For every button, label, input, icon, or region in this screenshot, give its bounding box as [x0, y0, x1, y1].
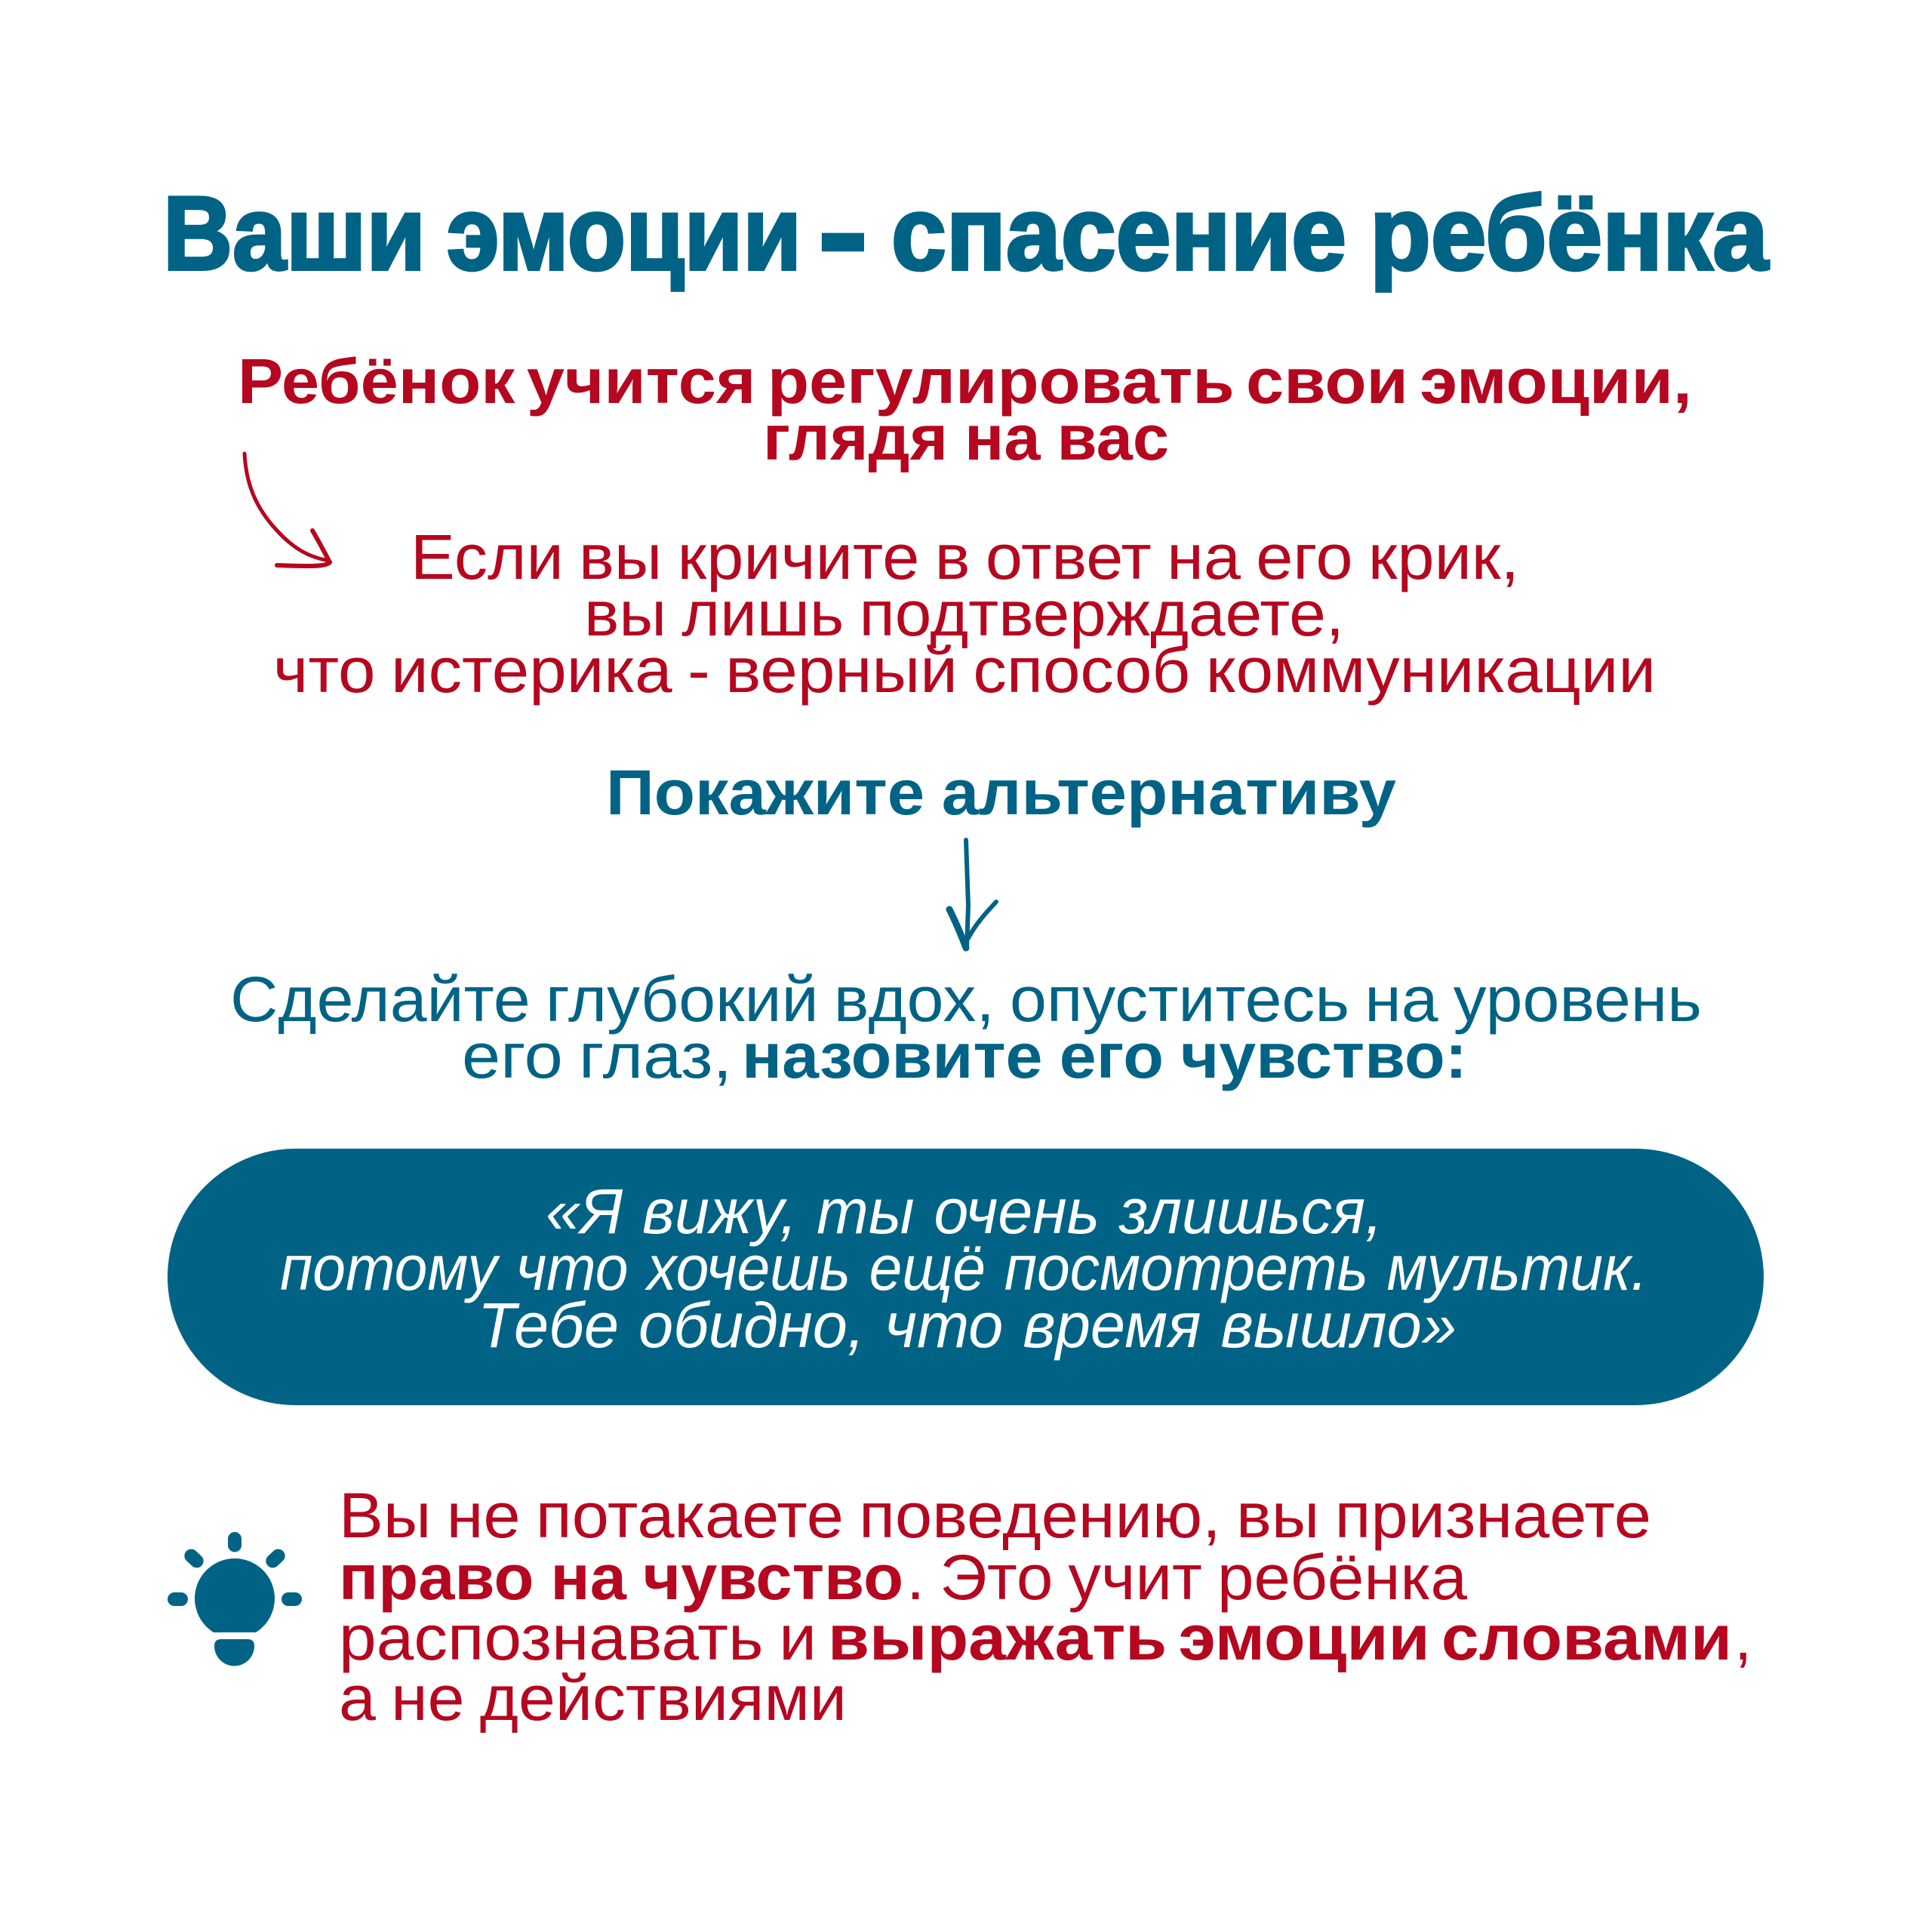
title: эмоции [447, 175, 801, 292]
teal text block [230, 964, 1702, 1091]
bottom text block: а не действиями [339, 1663, 847, 1734]
teal text block: его глаз, [462, 1020, 732, 1091]
panel: quote pill: потому что хочешь ещё посмотреть мультик. [280, 1232, 1647, 1303]
teal heading: Покажите альтернативу [606, 757, 1396, 828]
title: ребёнка [1370, 175, 1770, 292]
bottom text block: распознавать и [339, 1602, 817, 1673]
bottom text block: Вы не потакаете поведению, вы признаете [339, 1480, 1651, 1551]
red text block [273, 521, 1656, 706]
teal text block: Сделайте глубокий вдох, опуститесь на уровень [230, 964, 1702, 1035]
title [163, 175, 1770, 292]
title: спасение [891, 175, 1346, 292]
panel: quote pill: Тебе обидно, что время вышло» [478, 1290, 1457, 1361]
red heading: глядя на вас [763, 402, 1169, 473]
red text block: что истерика - верный способ коммуникации [273, 635, 1656, 706]
panel: quote pill [168, 1149, 1764, 1405]
title: Ваши [163, 175, 426, 292]
bottom text block: . Это учит ребёнка [906, 1542, 1467, 1613]
panel: quote pill: «Я вижу, ты очень злишься, [546, 1176, 1383, 1247]
bottom text block: право на чувство [339, 1542, 903, 1613]
bottom text block [339, 1480, 1752, 1734]
red heading [238, 346, 1692, 473]
arrow: red curved [245, 454, 330, 566]
bottom text block: выражать эмоции словами [828, 1602, 1732, 1673]
red text block: Если вы кричите в ответ на его крик, [411, 521, 1519, 592]
red text block: вы лишь подтверждаете, [584, 578, 1344, 649]
teal text block: назовите его чувство: [742, 1020, 1467, 1091]
bottom text block: , [1734, 1602, 1752, 1673]
red heading: Ребёнок учится регулировать свои эмоции, [238, 346, 1692, 417]
icon: light bulb [168, 1532, 302, 1666]
title: - [820, 175, 866, 292]
arrow: teal down [949, 840, 996, 948]
